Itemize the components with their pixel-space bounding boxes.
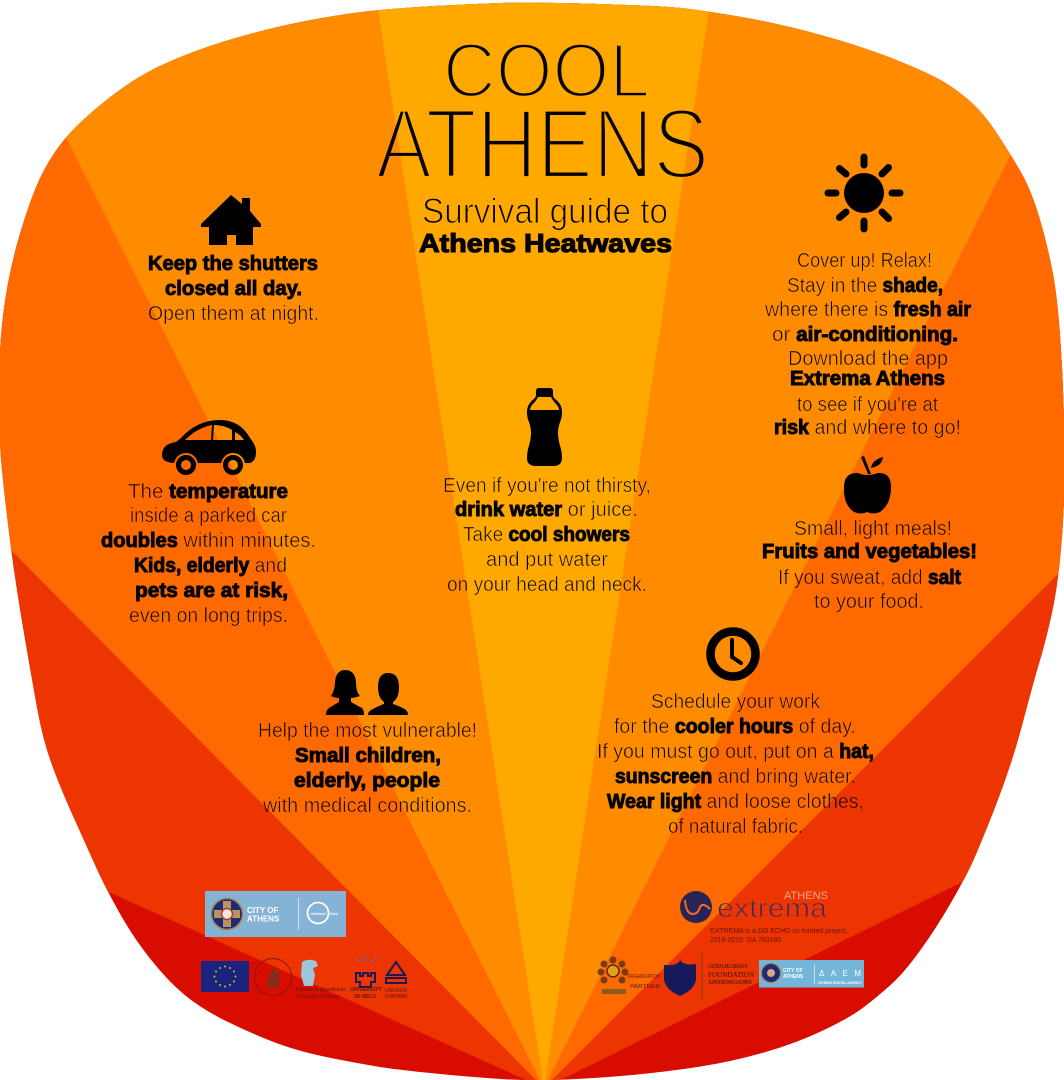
- title: ATHENS: [376, 88, 709, 199]
- text: parked car: inside a parked car: [130, 505, 287, 527]
- icon: apple: [844, 456, 891, 514]
- logo: foundation: FOUNDATION: [708, 970, 755, 979]
- logo: foundation: SUPPORTED BY FOUNDATION: [708, 980, 752, 986]
- icon: two people: [326, 670, 408, 715]
- text: meals: Fruits and vegetables!: [762, 541, 977, 563]
- icon: house: [201, 195, 261, 245]
- logo: tower university: [350, 955, 383, 1000]
- subtitle: Survival guide to: [422, 192, 668, 231]
- logo: foundation: LATSIS PUBLIC BENEFIT: [708, 964, 748, 970]
- text: shade: Stay in the shade,: [787, 275, 943, 297]
- panel: shade: [764, 157, 971, 439]
- text: meals: [762, 518, 977, 613]
- logo: university seal: [254, 958, 292, 996]
- text: project credit: 2018-2019, GA 783180.: [710, 937, 783, 944]
- text: shade: where there is fresh air: [764, 299, 971, 321]
- text: schedule: Schedule your work: [651, 691, 821, 713]
- text: parked car: pets are at risk,: [135, 580, 288, 602]
- text: schedule: Wear light and loose clothes,: [607, 791, 864, 813]
- logo: foundation: [702, 952, 755, 1000]
- text: shutters: [148, 253, 319, 325]
- text: vulnerable people: with medical conditions.: [262, 795, 472, 817]
- text: drink water: and put water: [486, 549, 608, 571]
- text: shade: or air-conditioning.: [772, 324, 958, 346]
- logo: triangle mark: UNIVERS: [385, 988, 408, 994]
- text: parked car: doubles within minutes.: [101, 530, 316, 552]
- text: drink water: on your head and neck.: [447, 574, 647, 596]
- logo: City of Athens box: resilient: [310, 911, 326, 916]
- panel: meals: [762, 456, 977, 613]
- panel: drink water: [443, 388, 651, 596]
- logo: City of Athens box: CITY OF: [247, 906, 279, 915]
- text: parked car: even on long trips.: [129, 605, 288, 627]
- text: drink water: Even if you're not thirsty,: [443, 475, 651, 497]
- text: schedule: If you must go out, put on a hat,: [597, 741, 874, 763]
- logo: Extrema Athens: ATHENS: [784, 890, 828, 902]
- text: project credit: EXTREMA is a DG ECHO co-funded project,: [710, 928, 848, 935]
- text: parked car: The temperature: [128, 481, 288, 503]
- text: drink water: [443, 475, 651, 596]
- logo: City of Athens box: ATHENS: [247, 914, 280, 924]
- logo: triangle mark: [385, 962, 408, 1000]
- text: drink water: Take cool showers: [463, 524, 630, 546]
- text: shade: Cover up! Relax!: [797, 250, 932, 272]
- text: drink water: drink water or juice.: [455, 499, 638, 521]
- logo: City of Athens and agency box: ATHENS: [783, 974, 804, 980]
- text: shutters: closed all day.: [165, 278, 302, 300]
- text: meals: Small, light meals!: [794, 518, 952, 540]
- logo: shield: [664, 959, 696, 996]
- text: vulnerable people: elderly, people: [294, 770, 440, 792]
- icon: sun: [828, 157, 900, 229]
- title: COOL: [443, 28, 650, 114]
- text: meals: to your food.: [814, 591, 924, 613]
- text: parked car: [101, 481, 316, 627]
- text: shutters: Open them at night.: [148, 303, 319, 325]
- logo: City of Athens box: cities: [328, 911, 339, 916]
- panel: schedule: [597, 632, 874, 838]
- text: vulnerable people: Help the most vulnerable!: [258, 720, 477, 742]
- text: shade: risk and where to go!: [774, 417, 961, 439]
- text: schedule: for the cooler hours of day.: [614, 716, 856, 738]
- text: schedule: [597, 691, 874, 838]
- logo: City of Athens and agency box: CITY OF: [783, 968, 803, 974]
- logo: City of Athens box: [205, 891, 346, 937]
- subtitle: [419, 192, 672, 258]
- text: meals: If you sweat, add salt: [778, 567, 961, 589]
- text: shade: [764, 250, 971, 439]
- text: schedule: of natural fabric.: [668, 816, 803, 838]
- logo: helmet and university name: University of Athens: [296, 994, 340, 1000]
- logo: City of Athens and agency box: ΔΑΕΜ: [819, 969, 861, 978]
- subtitle: Athens Heatwaves: [419, 228, 672, 258]
- title: [376, 28, 709, 199]
- logo: flower partner: PARTNER: [630, 984, 660, 990]
- logo: tower university: UNIVERSITY: [350, 987, 383, 993]
- panel: parked car: [101, 420, 316, 627]
- icon: car: [162, 420, 256, 477]
- text: schedule: sunscreen and bring water.: [615, 766, 856, 788]
- text: shade: to see if you're at: [797, 394, 938, 416]
- logo: EU flag: [201, 961, 249, 992]
- icon: clock: [710, 632, 756, 676]
- logo: City of Athens and agency box: ATHENS DIGITAL AGENCY: [818, 981, 863, 985]
- text: vulnerable people: Small children,: [295, 745, 441, 767]
- text: parked car: Kids, elderly and: [134, 555, 287, 577]
- panel: shutters: [148, 195, 319, 325]
- text: shade: Download the app: [788, 348, 948, 370]
- logo: helmet and university name: [296, 960, 346, 1000]
- logo: flower partner: [598, 956, 660, 994]
- text: shade: Extrema Athens: [790, 368, 945, 390]
- logo: flower partner: ORGANIZATION: [627, 974, 660, 980]
- logo: triangle mark: CHATHAM: [385, 994, 407, 1000]
- icon: bottle: [527, 388, 562, 466]
- panel: vulnerable people: [258, 670, 477, 817]
- logo: Extrema Athens: extrema: [717, 893, 828, 923]
- text: shutters: Keep the shutters: [148, 253, 318, 275]
- logo: Extrema Athens: [680, 890, 828, 923]
- text: project credit: [710, 928, 848, 944]
- logo: tower university: OF BELO: [354, 994, 376, 1000]
- text: vulnerable people: [258, 720, 477, 817]
- logo: City of Athens and agency box: [759, 960, 864, 988]
- logo: helmet and university name: National & Kapodistrian: [296, 987, 346, 993]
